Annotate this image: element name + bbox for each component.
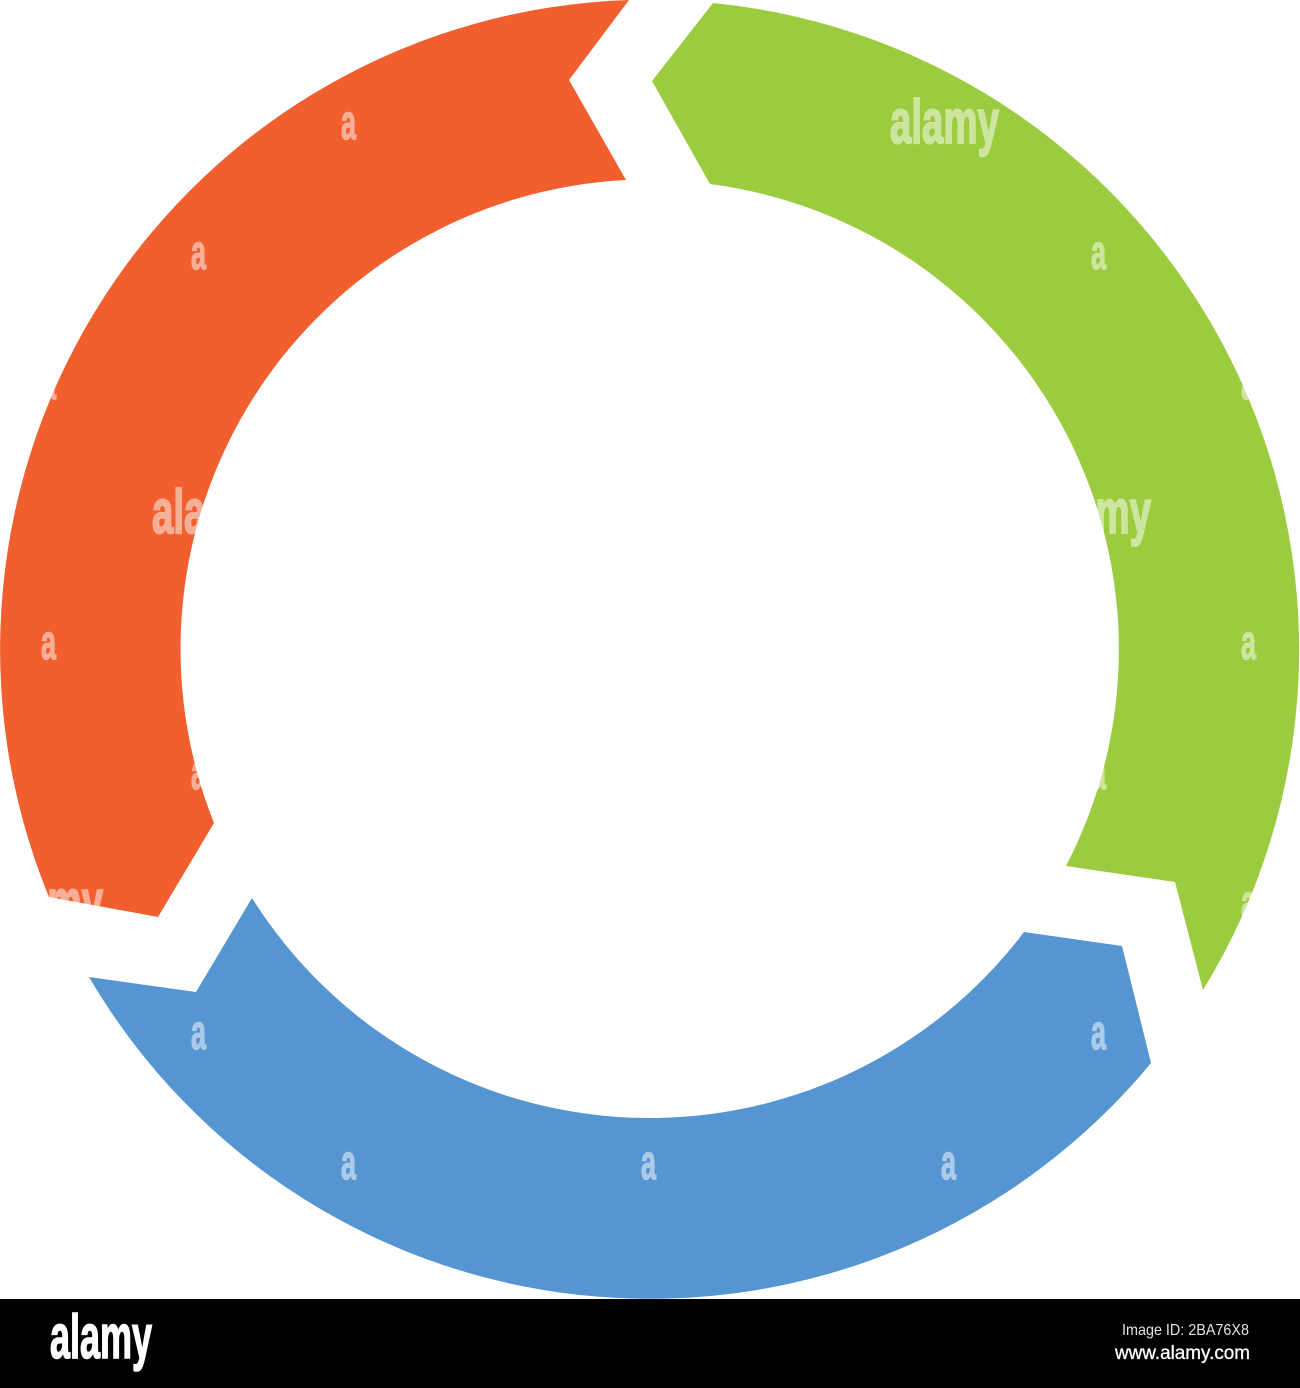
watermark: small letters <box>41 96 1256 1190</box>
watermark: small letters: a <box>191 746 206 800</box>
watermark: large words: alamy <box>152 478 261 547</box>
watermark: small letters: a <box>1091 226 1106 280</box>
watermark: large words: alamy <box>1042 478 1151 547</box>
watermark: large words <box>0 88 1151 937</box>
watermark: small letters: a <box>941 1136 956 1190</box>
watermark: small letters: a <box>1241 356 1256 410</box>
footer bar <box>0 1299 1300 1388</box>
watermark: small letters: a <box>41 616 56 670</box>
arrow segment: blue <box>89 898 1151 1299</box>
watermark: small letters: a <box>341 1136 356 1190</box>
arrow segment: green <box>652 3 1299 990</box>
watermark pattern <box>0 88 1256 1190</box>
watermark: small letters: a <box>1241 876 1256 930</box>
watermark: small letters: a <box>191 226 206 280</box>
watermark: small letters: a <box>641 1136 656 1190</box>
watermark: small letters: a <box>341 96 356 150</box>
watermark: small letters: a <box>1091 746 1106 800</box>
watermark: large words: alamy <box>890 88 999 157</box>
watermark: small letters: a <box>1241 616 1256 670</box>
image id: Image ID: 2BA76X8 <box>1122 1322 1249 1339</box>
watermark: small letters: a <box>191 1006 206 1060</box>
footer logo: alamy <box>50 1303 152 1372</box>
website: www.alamy.com <box>1114 1343 1250 1364</box>
watermark: small letters: a <box>1091 1006 1106 1060</box>
watermark: small letters: a <box>41 356 56 410</box>
arrow segment: orange <box>0 0 629 917</box>
